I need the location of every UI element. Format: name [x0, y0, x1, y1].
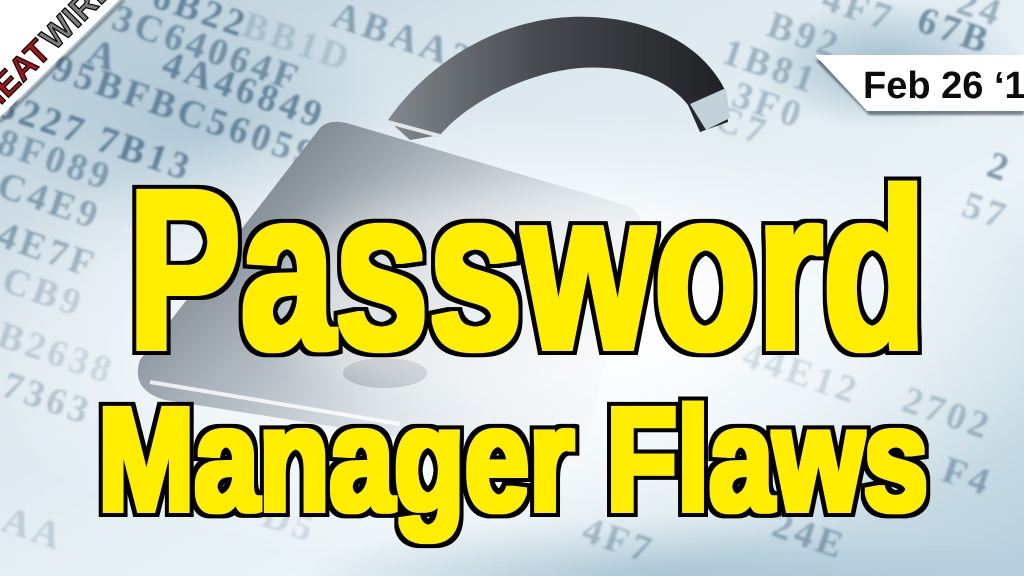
hex code background: 24E: [767, 504, 852, 568]
padlock highlight: [150, 382, 400, 424]
date tag: [815, 55, 1024, 115]
date text: Feb 26 ‘1: [863, 65, 1024, 107]
padlock: [138, 17, 730, 463]
padlock body: [138, 122, 641, 462]
hex code background: 7363: [0, 364, 98, 433]
brand ribbon: [0, 0, 124, 122]
hex code background: 4F7: [577, 509, 660, 572]
ribbon edge: [0, 0, 124, 122]
hex code background: D5: [257, 494, 322, 551]
hex code background: 4A46849: [157, 43, 331, 138]
padlock shackle: [388, 17, 730, 140]
hex code background: 67B: [912, 0, 997, 63]
hex code background: 2702: [897, 379, 998, 448]
hex code background: BB1D: [237, 4, 358, 80]
hex code background: A: [82, 31, 125, 81]
tag shadow: [815, 60, 1024, 115]
ribbon white corner: [0, 0, 119, 117]
hex code background: 57: [957, 184, 1014, 238]
hex code background: C7: [709, 97, 774, 154]
hex code background: 44E12: [737, 334, 865, 413]
hex code background: B92: [762, 4, 847, 68]
haze over lock: [280, 190, 760, 410]
hex code background: 3F0: [727, 74, 810, 137]
hex code background: 95BFBC56059: [47, 47, 324, 177]
title: [98, 144, 928, 542]
fingerprint: [343, 358, 427, 388]
hex code background: 1B81: [717, 31, 824, 103]
hex code background: 2: [982, 144, 1017, 191]
hex code background: F4: [937, 449, 998, 505]
tag plate: [815, 55, 1024, 111]
